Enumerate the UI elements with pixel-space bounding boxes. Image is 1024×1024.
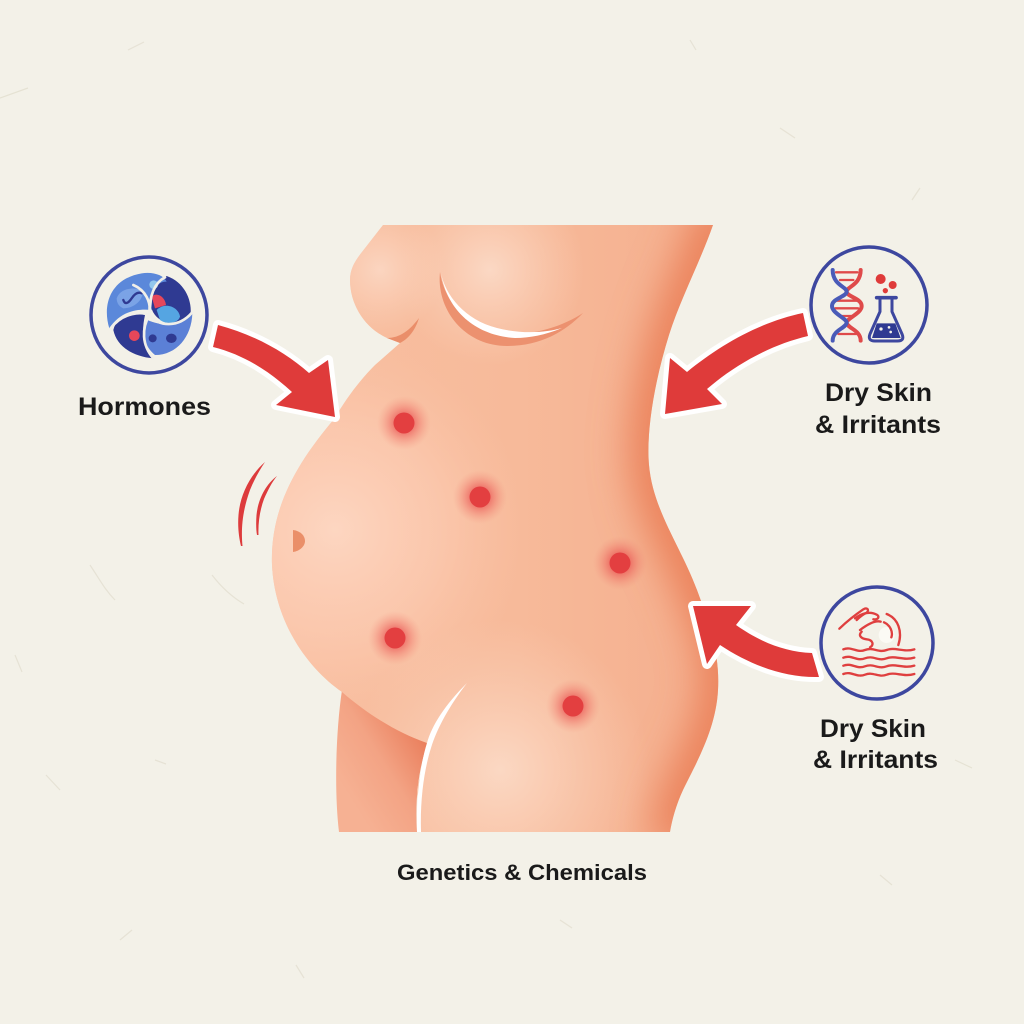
right breast crease shadow (440, 272, 583, 346)
illustration: pregnant torso (260, 205, 730, 845)
thigh crease highlight (417, 683, 467, 832)
label: Dry Skin and Irritants lower: & Irritants (813, 746, 938, 774)
back leg (336, 690, 428, 832)
label: Dry Skin and Irritants upper: Dry Skin (825, 379, 932, 407)
right breast white highlight (441, 273, 562, 338)
left breast crease (387, 318, 419, 343)
arrow: hormones (213, 325, 335, 417)
torso and thigh body (260, 205, 730, 845)
label: Genetics and Chemicals: Genetics & Chemicals (397, 860, 647, 885)
icon: hormones (91, 257, 207, 373)
icon: hand over irritated skin waves (821, 587, 933, 699)
icon: DNA and flask (811, 247, 927, 363)
label: Hormones: Hormones (78, 393, 211, 421)
irritation spots (368, 396, 647, 733)
label: Dry Skin and Irritants upper: & Irritants (815, 411, 941, 439)
navel (293, 530, 305, 552)
label: Dry Skin and Irritants lower: Dry Skin (820, 715, 926, 743)
arrow: dry skin lower (693, 606, 819, 677)
arrow: dry skin upper (665, 313, 808, 414)
motion lines near belly (238, 462, 277, 546)
